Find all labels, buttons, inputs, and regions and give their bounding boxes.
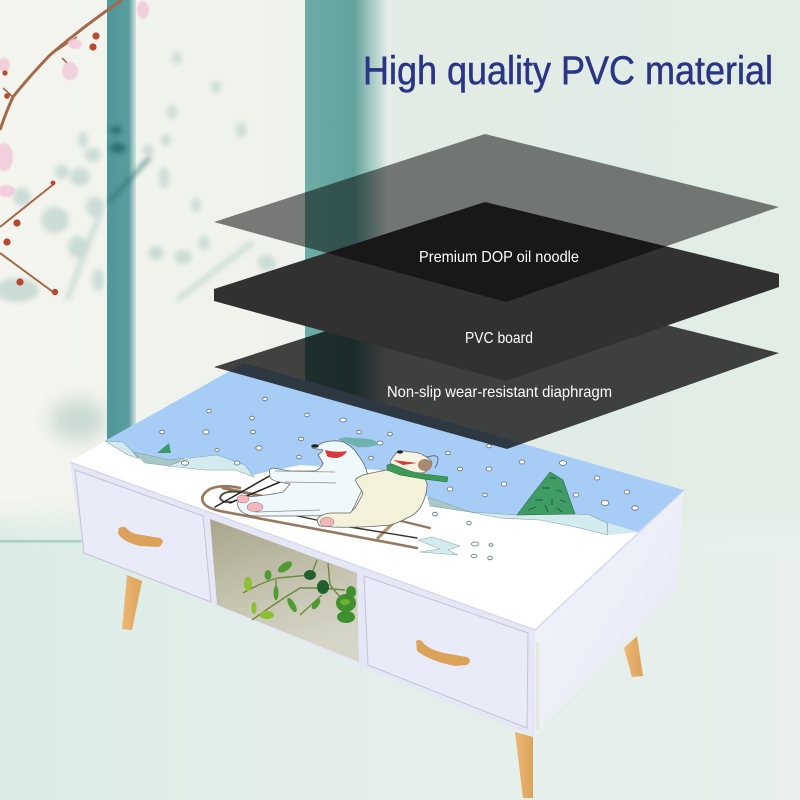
right drawer handle: [416, 640, 470, 666]
large pine tree: [517, 472, 575, 515]
distant teal hills: [133, 452, 470, 512]
table front right leg: [515, 732, 533, 798]
table right side face: [535, 490, 684, 737]
label: diaphragm: Non-slip wear-resistant diaphragm: [387, 384, 612, 401]
small pine tree: [157, 443, 171, 453]
table top trim: [70, 462, 684, 630]
label: Premium DOP oil noodle: Premium DOP oil noodle: [419, 249, 579, 266]
layer: non-slip wear-resistant diaphragm: [214, 280, 779, 449]
nose: [311, 444, 319, 448]
pink bear paws: [237, 495, 334, 527]
label: PVC board: PVC board: [465, 330, 533, 347]
table front face: [70, 462, 535, 737]
teal wall band right: [305, 0, 387, 420]
sled: [202, 470, 430, 548]
right drawer: [364, 576, 528, 728]
pale snow hills: [105, 441, 638, 535]
left drawer handle: [118, 527, 163, 547]
table front left leg: [122, 575, 142, 630]
falling snow dots: [160, 397, 638, 560]
table back right leg: [624, 636, 643, 677]
bear nose: [397, 450, 403, 454]
layer: PVC board: [214, 202, 779, 381]
rough board edge: [536, 642, 540, 730]
mouth: [325, 450, 347, 458]
table top: [70, 363, 684, 630]
tablecloth sky: [105, 363, 684, 535]
coffee table: [70, 363, 684, 798]
teal wall band left: [107, 0, 136, 445]
plant in shelf: [243, 559, 356, 623]
center shelf opening: [210, 519, 359, 662]
left drawer: [75, 470, 211, 602]
snow spray behind sled: [418, 537, 460, 555]
layer: premium DOP oil: [214, 134, 779, 302]
white polar bear: [238, 437, 378, 516]
green scarf: [387, 464, 448, 482]
bear mouth: [393, 460, 417, 465]
cream polar bear: [317, 450, 448, 527]
earmuff: [418, 456, 438, 471]
blurred plant shadows on wall: [0, 52, 276, 302]
hat: [338, 437, 378, 447]
cherry blossom branches: [0, 0, 149, 295]
arm fur lines: [255, 471, 336, 512]
